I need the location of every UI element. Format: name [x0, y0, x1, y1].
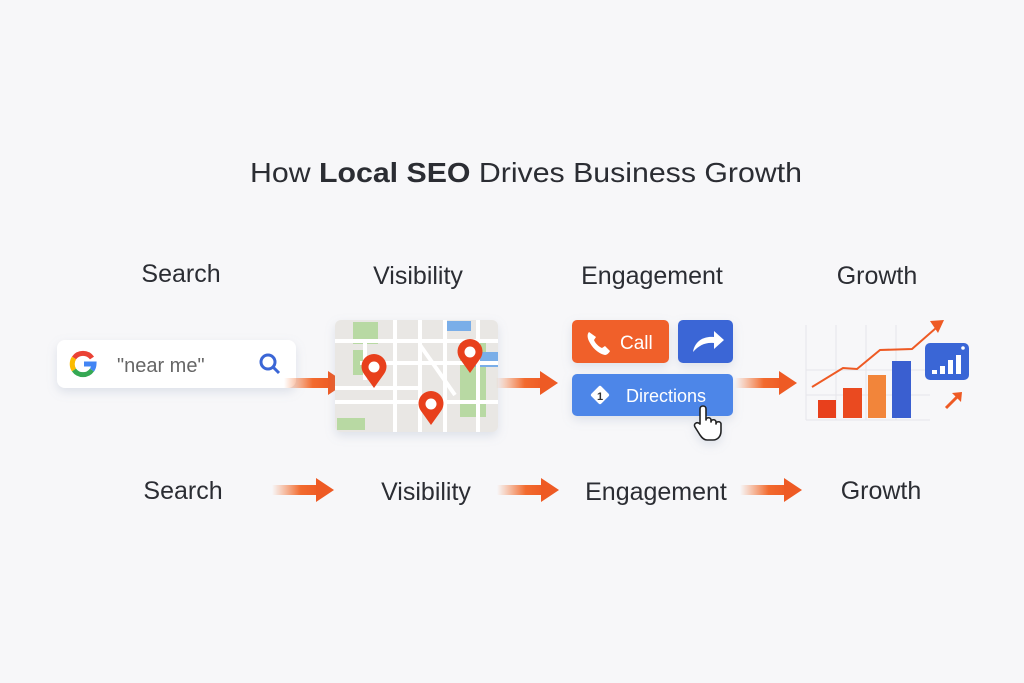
top labels: Search	[141, 260, 221, 288]
bottom arrows	[272, 478, 802, 502]
call button	[572, 320, 669, 363]
search box	[57, 340, 296, 388]
engagement buttons: Directions	[626, 386, 706, 406]
top labels	[141, 260, 917, 290]
pins	[362, 354, 386, 388]
bottom flow labels: Growth	[841, 477, 921, 505]
search box: "near me"	[117, 355, 205, 377]
share button	[678, 320, 733, 363]
top labels: Engagement	[581, 262, 723, 290]
bottom flow labels: Engagement	[585, 478, 727, 506]
icon: google G	[72, 353, 94, 375]
bottom flow labels: Search	[143, 477, 223, 505]
map	[335, 320, 498, 432]
top labels: Growth	[837, 262, 917, 290]
title: How Local SEO Drives Business Growth	[250, 157, 802, 188]
icon: stats badge	[925, 343, 969, 380]
bottom flow labels	[143, 477, 921, 506]
arrow 2	[496, 371, 558, 395]
icon: cursor hand	[694, 406, 721, 440]
top labels: Visibility	[373, 262, 463, 290]
engagement buttons	[572, 320, 733, 440]
directions button	[572, 374, 733, 416]
bottom flow labels: Visibility	[381, 478, 471, 506]
arrow 3	[735, 371, 797, 395]
engagement buttons: Call	[620, 333, 653, 354]
growth chart	[806, 320, 969, 420]
engagement buttons: 1	[597, 391, 603, 403]
icon: magnifier	[261, 355, 279, 373]
arrow 1	[284, 371, 346, 395]
